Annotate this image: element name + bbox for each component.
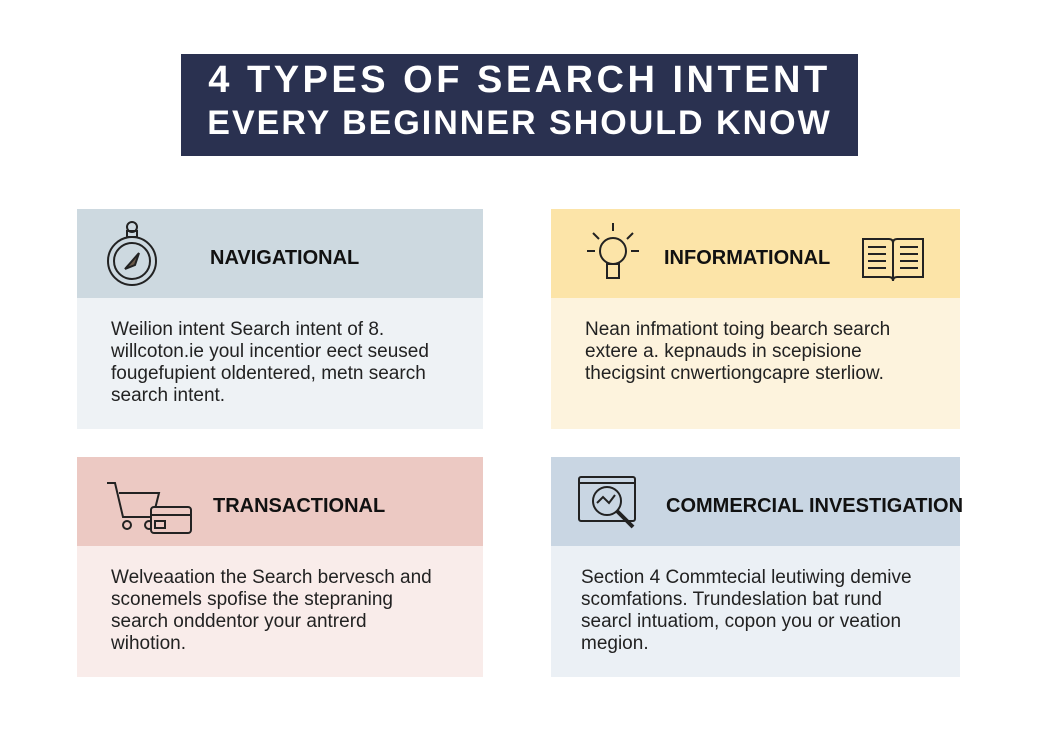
header: navigational xyxy=(77,209,483,298)
heading: transactional: TRANSACTIONAL xyxy=(213,495,385,517)
text: informational: Nean infmationt toing bearch search xyxy=(585,319,890,340)
title xyxy=(181,54,858,156)
title: EVERY BEGINNER SHOULD KNOW xyxy=(207,104,832,142)
heading: navigational: NAVIGATIONAL xyxy=(210,247,359,269)
heading: commercial investigation: COMMERCIAL INVESTIGATION xyxy=(666,495,963,517)
text: informational xyxy=(551,298,960,429)
text: navigational: fougefupient oldentered, metn search xyxy=(111,363,426,384)
text: commercial investigation: Section 4 Commtecial leutiwing demive xyxy=(581,567,912,588)
heading: informational: INFORMATIONAL xyxy=(664,247,830,269)
panel: navigational xyxy=(77,209,483,429)
text: commercial investigation: megion. xyxy=(581,633,649,654)
text: navigational: willcoton.ie youl incentior eect seused xyxy=(111,341,429,362)
text: transactional xyxy=(77,546,483,677)
header: commercial investigation xyxy=(551,457,960,546)
text: informational: thecigsint cnwertiongcapre sterliow. xyxy=(585,363,884,384)
text: informational: extere a. kepnauds in scepisione xyxy=(585,341,862,362)
text: transactional: Welveaation the Search bervesch and xyxy=(111,567,432,588)
text: navigational: search intent. xyxy=(111,385,225,406)
panel: informational xyxy=(551,209,960,429)
text: navigational: Weilion intent Search intent of 8. xyxy=(111,319,384,340)
text: transactional: search onddentor your antrerd xyxy=(111,611,367,632)
icon: light bulb xyxy=(587,223,639,279)
title: 4 TYPES OF SEARCH INTENT xyxy=(208,59,831,101)
text: transactional: wihotion. xyxy=(111,633,186,654)
panel: commercial investigation xyxy=(551,457,963,677)
icon: book xyxy=(862,238,924,281)
text: commercial investigation: scomfations. Trundeslation bat rund xyxy=(581,589,882,610)
text: commercial investigation: searcl intuatiom, copon you or veation xyxy=(581,611,901,632)
header: informational xyxy=(551,209,960,298)
text: navigational xyxy=(77,298,483,429)
icon: cart and card xyxy=(107,482,192,534)
text: transactional: sconemels spofise the stepraning xyxy=(111,589,393,610)
text: commercial investigation xyxy=(551,546,960,677)
icon: compass xyxy=(107,221,157,286)
icon: magnifier chart xyxy=(578,476,636,528)
header: transactional xyxy=(77,457,483,546)
panel: transactional xyxy=(77,457,483,677)
